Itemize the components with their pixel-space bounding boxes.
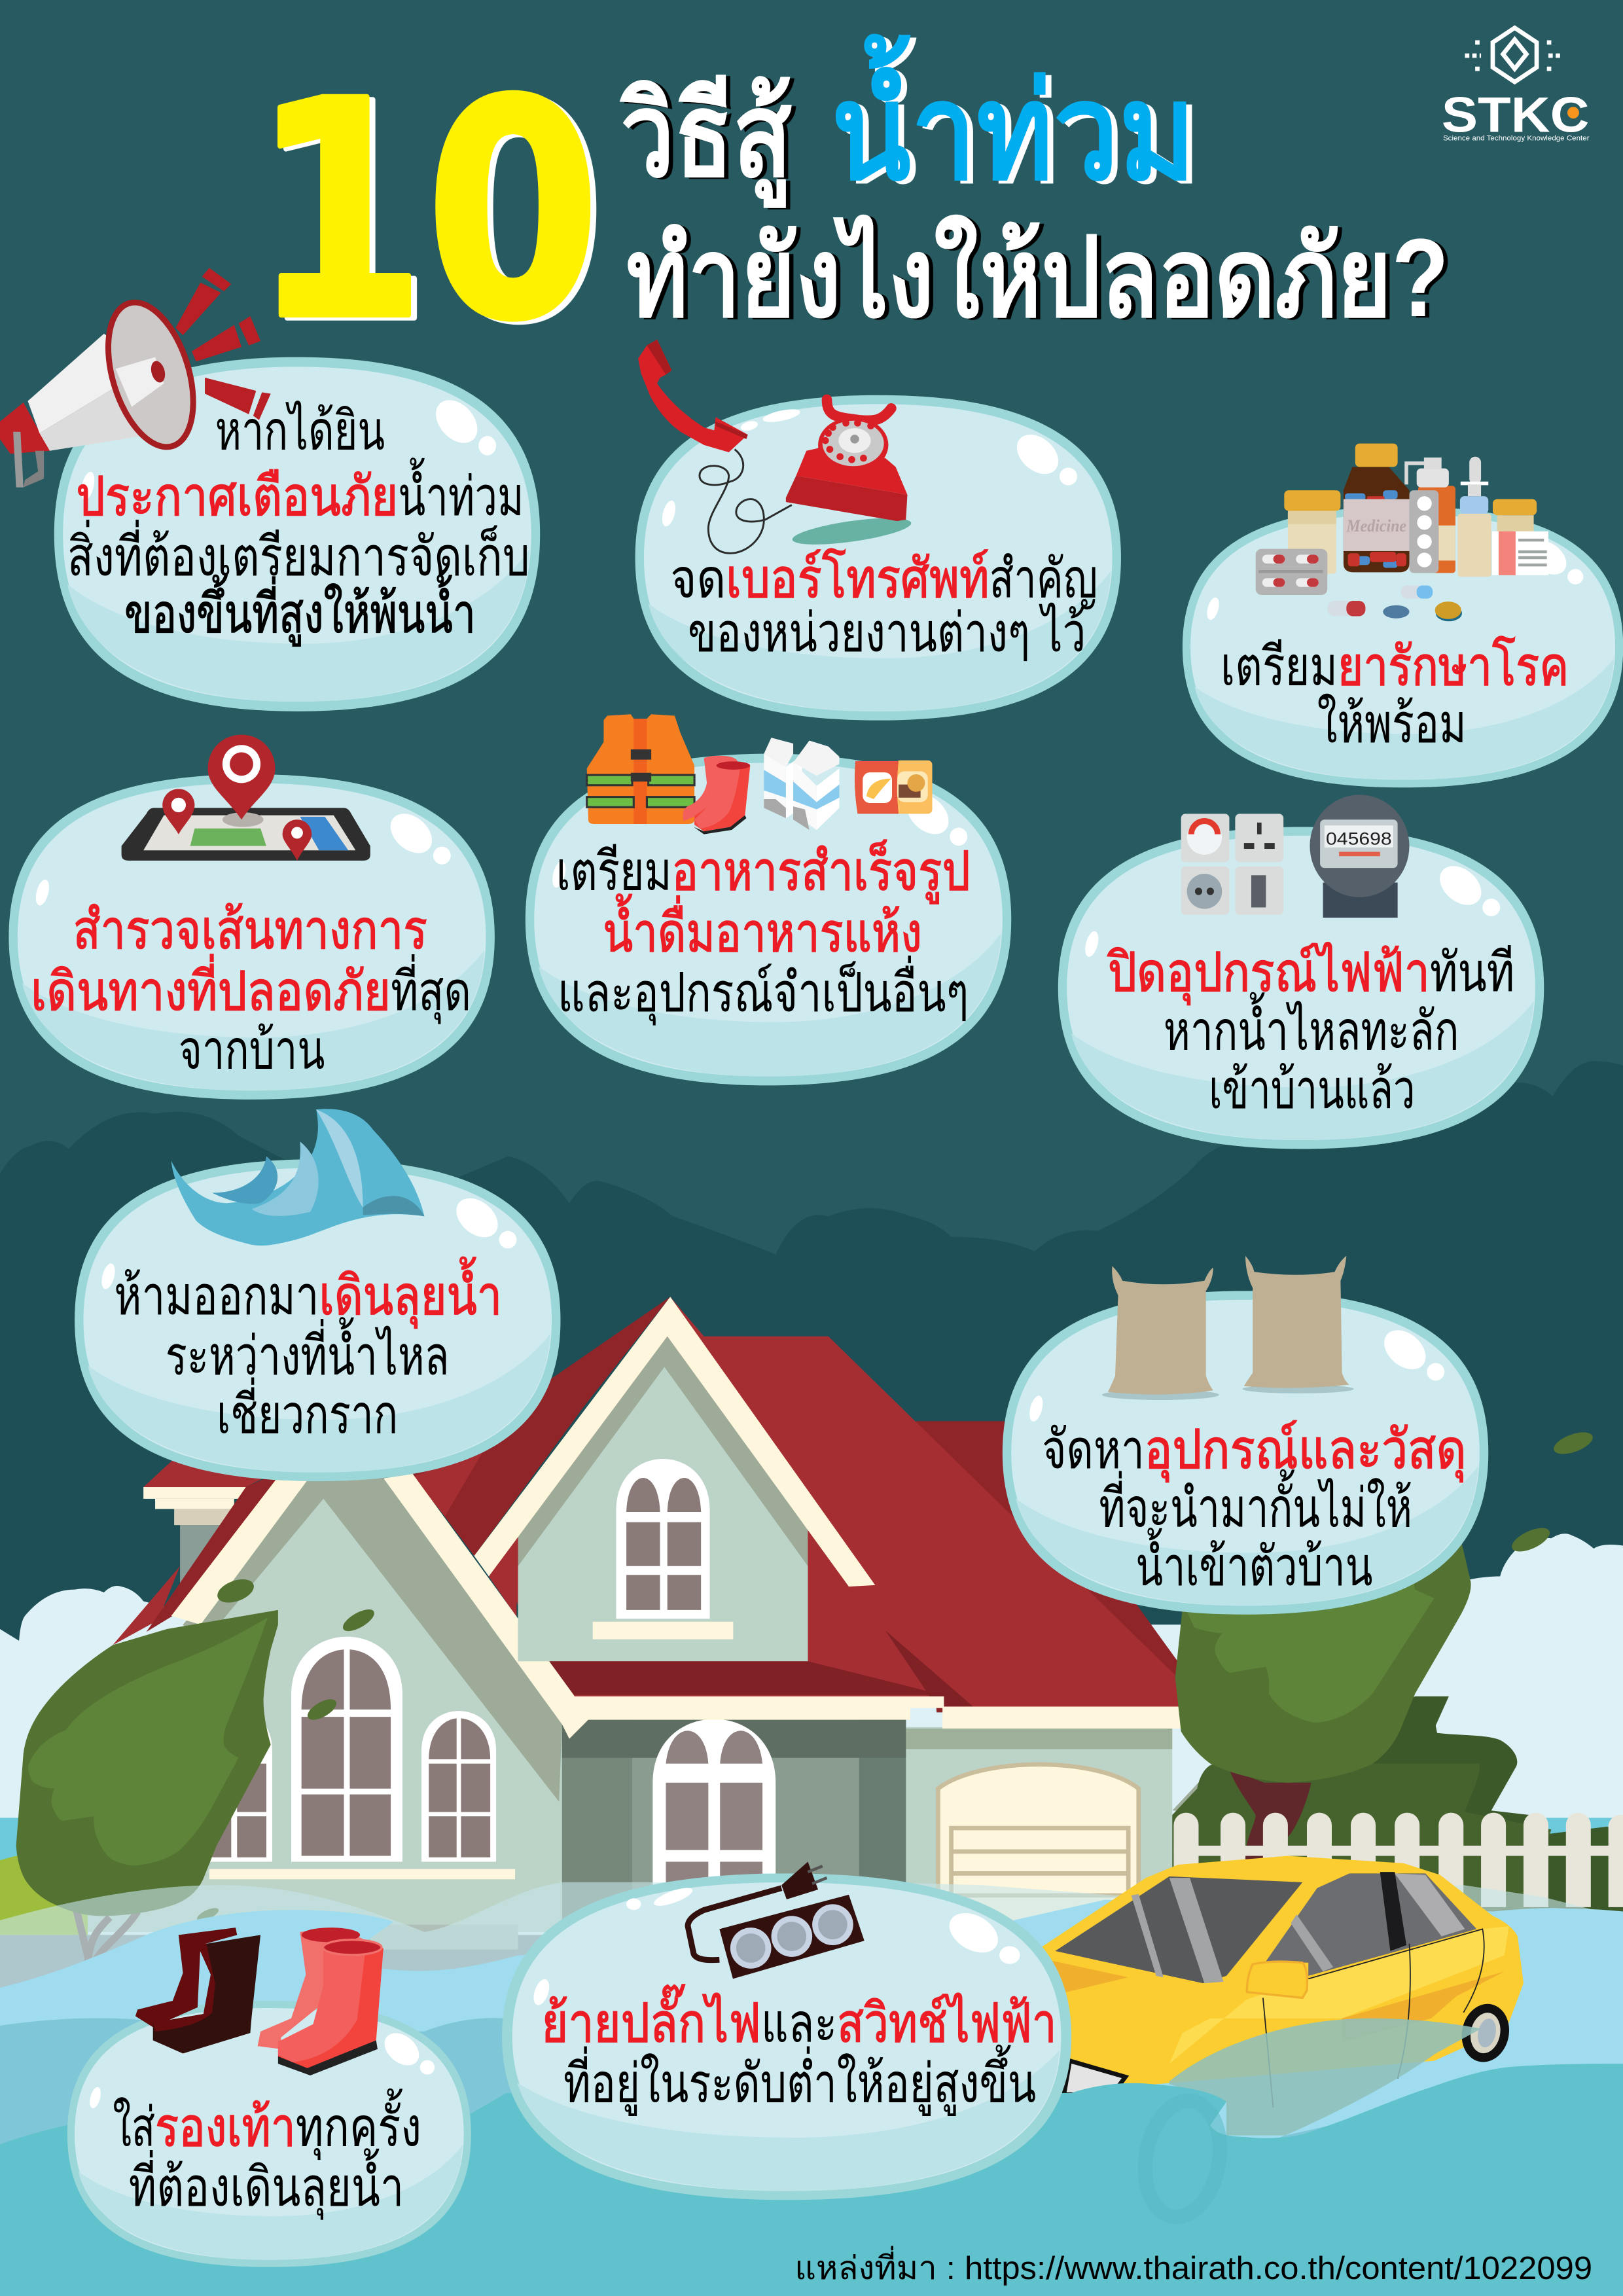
title line 1 blue: น้ำท่วม <box>831 33 1196 207</box>
small window <box>421 1711 496 1862</box>
bubble highlights <box>626 1884 694 1910</box>
garage door <box>938 1765 1139 1925</box>
bubble text: เข้าบ้านแล้ว <box>1209 1059 1415 1120</box>
translucent wave over car <box>1169 2018 1481 2136</box>
panel: do not wade <box>75 1109 560 1481</box>
nasal spray <box>1469 457 1481 484</box>
panel: food and water <box>526 714 1011 1085</box>
bubble text <box>1221 636 1569 754</box>
bubble text: ของหน่วยงานต่างๆ ไว้ <box>688 602 1086 663</box>
icon: sockets and meter: 045698 <box>1326 829 1392 848</box>
windshield <box>1055 1876 1302 1983</box>
bubble text <box>113 2088 421 2220</box>
door shade <box>1342 1971 1505 2042</box>
bubble <box>67 2001 471 2267</box>
bubble text <box>114 1257 502 1444</box>
bubble text: หากได้ยิน <box>215 401 385 461</box>
title line 1 white: วิธีสู้ <box>619 69 792 208</box>
bubble text: ที่สุด <box>391 954 471 1024</box>
logo wordmark: STKC <box>1442 87 1590 143</box>
panel: safe route <box>9 735 495 1100</box>
far water, hill and road <box>0 1818 1623 1994</box>
bubble <box>1058 827 1544 1149</box>
bubble text: หากน้ำไหลทะลัก <box>1164 992 1459 1061</box>
bubble <box>54 357 540 711</box>
foliage <box>1175 1544 1471 1783</box>
bubble text: เดินทางที่ปลอดภัย <box>31 954 391 1022</box>
back roof <box>916 1421 1215 1712</box>
teal water <box>0 2064 1623 2296</box>
roof eave trims <box>574 1696 944 1708</box>
icon: medicines <box>1256 444 1548 621</box>
wheel <box>1456 2000 1514 2066</box>
bubble text <box>556 839 971 1026</box>
bubble text <box>31 899 471 1080</box>
bubble text: จัดหา <box>1042 1419 1145 1480</box>
icon: rubber boots <box>135 1928 383 2075</box>
bubble text: ปิดอุปกรณ์ไฟฟ้า <box>1107 942 1430 1005</box>
logo icon <box>1465 27 1563 82</box>
panel: move plugs <box>502 1862 1071 2200</box>
bubble text: จด <box>670 548 726 609</box>
left roof <box>143 1420 336 1487</box>
headlight <box>1064 2061 1126 2094</box>
title line 2: ทำยังไงให้ปลอดภัย? <box>626 214 1449 340</box>
source credit: แหล่งที่มา : https://www.thairath.co.th/content/1022099 <box>794 2246 1592 2286</box>
red boots <box>258 1928 363 2049</box>
bubble highlights <box>740 406 801 433</box>
steps <box>370 1925 518 1950</box>
chimney <box>143 1487 246 1596</box>
left jar <box>1288 511 1336 574</box>
title number 10: 10 <box>252 38 600 386</box>
bubble text: ทันที <box>1430 942 1515 1003</box>
bubble text: สิ่งที่ต้องเตรียมการจัดเก็บ <box>67 520 530 587</box>
right jar and box <box>1497 515 1534 534</box>
bubble text: รองเท้า <box>155 2096 296 2157</box>
panel: sandbags <box>1003 1256 1488 1615</box>
car <box>1024 1856 1524 2108</box>
blister pack <box>1256 549 1327 595</box>
red boots <box>683 756 738 821</box>
shadow <box>791 512 912 550</box>
bubble text <box>1107 942 1515 1120</box>
bubble text: ยารักษาโรค <box>1338 636 1569 697</box>
icon: life jacket boots milk snacks <box>587 714 932 834</box>
mirror <box>1247 1962 1307 1998</box>
icon: wave <box>171 1109 425 1246</box>
icon: red telephone <box>638 340 912 553</box>
dormer sill <box>593 1622 733 1640</box>
bubble text: สวิทช์ไฟฟ้า <box>837 1993 1057 2054</box>
bubble text: สำรวจเส้นทางการ <box>73 899 427 960</box>
porch window <box>652 1719 776 1903</box>
blister strip <box>1410 490 1438 573</box>
left window <box>205 1711 272 1862</box>
bubble text: ที่จะนำมากั้นไม่ให้ <box>1099 1469 1412 1538</box>
panel: boots <box>67 1928 471 2267</box>
bubble text <box>670 548 1097 663</box>
right wall <box>906 1727 1172 1925</box>
phone base <box>796 448 907 495</box>
life jacket <box>587 714 694 824</box>
dormer wall <box>518 1336 808 1661</box>
porch <box>562 1720 906 1925</box>
medicine bottle <box>1344 467 1410 572</box>
bubble text: เดินลุยน้ำ <box>319 1257 502 1329</box>
logo tagline: Science and Technology Knowledge Center <box>1443 135 1590 143</box>
forest silhouette <box>0 1061 1623 1903</box>
icon: sockets and meter <box>1181 795 1410 918</box>
snack packs <box>896 761 932 814</box>
bubble text: น้ำเข้าตัวบ้าน <box>1135 1528 1373 1597</box>
bubble text: และ <box>761 1993 837 2054</box>
loose pills <box>1400 585 1433 599</box>
bubble text: และอุปกรณ์จำเป็นอื่นๆ <box>558 956 969 1026</box>
big gable left trim <box>171 1477 309 1624</box>
bubble text: ทุกครั้ง <box>296 2088 421 2160</box>
dark boots <box>135 1928 237 2027</box>
panel: phone numbers <box>635 340 1121 721</box>
bubble text: น้ำดื่มอาหารแห้ง <box>603 894 922 963</box>
bubble text: เบอร์โทรศัพท์ <box>726 548 990 609</box>
bubble text: ย้ายปลั๊กไฟ <box>541 1984 761 2054</box>
main roof <box>497 1297 1207 1706</box>
icon: medicines: Medicine <box>1346 516 1406 535</box>
door highlight <box>1169 1926 1509 2064</box>
icon: map pin on tablet <box>122 735 370 861</box>
trunk <box>1229 1770 1311 1873</box>
milk cartons <box>764 738 793 767</box>
bubble text: ที่อยู่ในระดับต่ำให้อยู่สูงขึ้น <box>563 2044 1036 2116</box>
bubble text: อาหารสำเร็จรูป <box>671 839 971 905</box>
bubble <box>9 774 495 1100</box>
bubble text: ของขึ้นที่สูงให้พ้นน้ำ <box>124 575 476 647</box>
bubble text: เตรียม <box>556 841 671 902</box>
side window <box>1266 1873 1476 1976</box>
bubble text: ให้พร้อม <box>1317 693 1467 754</box>
bubble <box>75 1159 560 1481</box>
panel: turn off electricity <box>1058 795 1544 1149</box>
bubble text: จากบ้าน <box>179 1019 325 1080</box>
door lines <box>1263 1929 1484 2108</box>
window sill <box>209 1869 515 1879</box>
bubble text: ที่ต้องเดินลุยน้ำ <box>129 2148 404 2220</box>
rotary dial <box>818 417 888 473</box>
house <box>88 1297 1215 1950</box>
bubble text: น้ำท่วม <box>398 457 524 527</box>
handset <box>638 340 748 452</box>
light blue water <box>0 1900 1623 2296</box>
icon: megaphone <box>0 268 271 488</box>
pale water band <box>0 1882 1623 2049</box>
bubble <box>1003 1291 1488 1615</box>
icon: power strip <box>688 1862 865 1979</box>
panel: warning announcement <box>0 268 540 711</box>
bubble text: อุปกรณ์และวัสดุ <box>1145 1419 1467 1482</box>
submerged wheel <box>1136 2095 1228 2223</box>
picket fence <box>1173 1813 1623 1932</box>
right tree <box>1172 1544 1623 1917</box>
flying leaves <box>195 1428 1596 1924</box>
bubble text <box>541 1984 1057 2116</box>
bubble text: ประกาศเตือนภัย <box>76 466 398 527</box>
left tree <box>16 1610 278 1969</box>
logo STKC <box>1442 27 1590 143</box>
bubble text: ห้ามออกมา <box>114 1265 319 1326</box>
bubble text: เชี่ยวกราก <box>217 1377 398 1444</box>
bubble text: สำคัญ <box>990 548 1097 610</box>
bubble <box>1183 507 1623 787</box>
orange spray bottle <box>1418 486 1455 573</box>
handset cradle <box>827 399 891 421</box>
bubble <box>526 754 1011 1085</box>
title <box>252 33 1449 386</box>
bubble <box>635 395 1121 721</box>
back bush <box>1193 1696 1623 1917</box>
icon: sandbags <box>1102 1256 1354 1400</box>
bubble <box>502 1873 1071 2200</box>
car body <box>1024 1856 1524 2108</box>
bubble text: เตรียม <box>1221 636 1338 697</box>
telephone cord <box>700 450 792 553</box>
bubble text <box>67 401 530 647</box>
big gable right trim <box>383 1474 588 1739</box>
bubble text <box>1042 1419 1467 1597</box>
logo orange dot <box>1567 107 1579 118</box>
big left gable wall <box>88 1471 562 1932</box>
bubble text: ใส่ <box>113 2096 155 2157</box>
mid blue water <box>0 2018 1463 2195</box>
tall window <box>291 1637 402 1862</box>
bubble text: ระหว่างที่น้ำไหล <box>166 1317 450 1386</box>
dormer gable trim <box>474 1297 875 1587</box>
dormer window <box>616 1459 710 1619</box>
panel: medicine <box>1183 444 1623 787</box>
sky and clouds <box>0 1534 1623 1946</box>
